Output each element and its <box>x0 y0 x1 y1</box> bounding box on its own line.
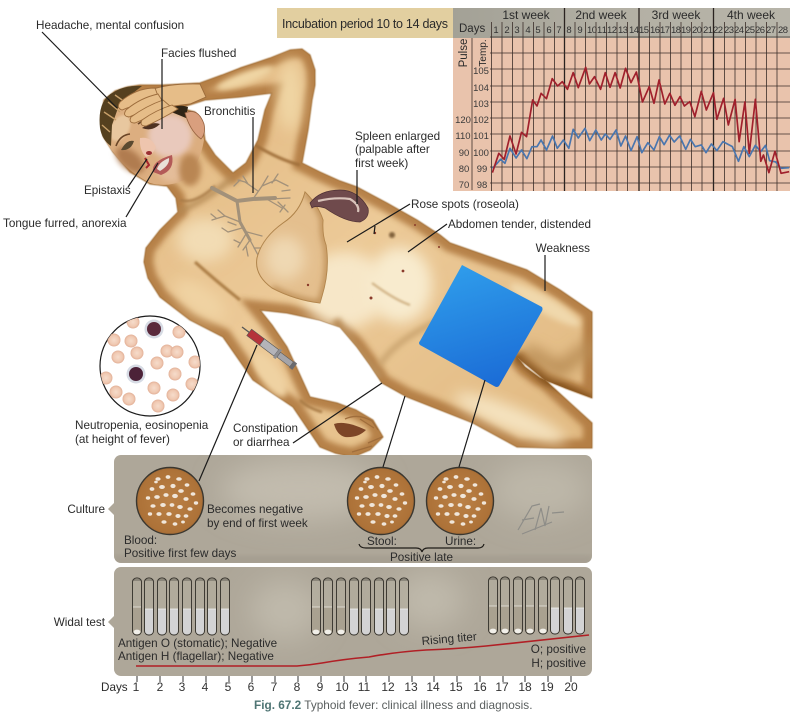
label: tongue <box>3 163 158 230</box>
days axis: 17 <box>495 680 509 694</box>
temperature line (red) <box>492 67 789 173</box>
chart header: 10 <box>587 25 597 36</box>
chart header: 25 <box>745 25 755 36</box>
blood culture note: by end of first week <box>207 517 308 530</box>
chart header: 17 <box>660 25 670 36</box>
mouth <box>153 155 173 175</box>
days axis: 9 <box>317 680 324 694</box>
days axis: 16 <box>473 680 487 694</box>
label: weakness: Weakness <box>536 242 590 255</box>
bronchial tree <box>211 174 290 256</box>
chart header: 3 <box>514 25 520 36</box>
chart header: 1st week <box>502 8 551 22</box>
days axis: 19 <box>540 680 554 694</box>
blood cell inset <box>100 316 202 416</box>
stool and urine results: Stool: <box>367 535 397 548</box>
ear <box>185 111 205 139</box>
blood result <box>124 534 237 560</box>
hand on forehead <box>118 84 206 126</box>
pulse axis values: 80 <box>459 164 469 175</box>
chart header: 28 <box>778 25 788 36</box>
chart header: 23 <box>724 25 734 36</box>
label: epistaxis <box>84 159 147 197</box>
chart header <box>453 8 790 38</box>
figure caption: Fig. 67.2 Typhoid fever: clinical illness and diagnosis. <box>254 698 532 712</box>
label: culture: Culture <box>67 503 105 516</box>
temperature axis values: 102 <box>473 115 489 126</box>
temperature axis values: 103 <box>473 99 489 110</box>
antigen negative text <box>118 637 277 663</box>
chart background <box>453 38 790 191</box>
label: abdomen <box>408 218 591 252</box>
chart header: 21 <box>703 25 713 36</box>
label: headache: Headache, mental confusion <box>36 19 184 32</box>
days axis: 12 <box>381 680 395 694</box>
patient figure <box>100 49 592 457</box>
pulse axis values: 90 <box>459 148 469 159</box>
label: facies flushed: Facies flushed <box>161 47 236 60</box>
white blood cells <box>126 320 164 384</box>
temperature and pulse chart <box>453 8 790 191</box>
chart header: 9 <box>577 25 583 36</box>
label: facies flushed <box>161 47 236 129</box>
label: spleen <box>355 130 440 204</box>
chart header: 2nd week <box>575 8 628 22</box>
blood culture dish <box>136 468 204 534</box>
body silhouette <box>101 49 592 457</box>
chart header: 4th week <box>727 8 776 22</box>
chart header: 26 <box>755 25 765 36</box>
test tubes, second series <box>312 578 408 635</box>
label: spleen: Spleen enlarged <box>355 130 440 143</box>
positive results: H; positive <box>531 657 586 670</box>
stool and urine results: Positive late <box>390 551 453 564</box>
days axis: 10 <box>335 680 349 694</box>
hand with open palm <box>334 416 382 452</box>
temperature axis values: 99 <box>477 164 487 175</box>
syringe <box>239 323 298 371</box>
label: spleen: first week) <box>355 157 408 170</box>
signature <box>518 504 564 534</box>
culture panel <box>114 455 592 564</box>
pulse axis values: 70 <box>459 180 469 191</box>
chart header: 22 <box>713 25 723 36</box>
days axis: 3 <box>179 680 186 694</box>
label: headache <box>36 19 184 108</box>
stool and urine results: Urine: <box>445 535 476 548</box>
incubation period box <box>277 8 453 38</box>
chart header: 8 <box>566 25 572 36</box>
chart header: 11 <box>597 25 607 36</box>
blood culture note <box>207 503 308 530</box>
temperature axis values: 101 <box>473 131 489 142</box>
chart header: 3rd week <box>652 8 701 22</box>
chart header: 20 <box>692 25 702 36</box>
pointer: urine line <box>459 380 485 467</box>
body shading <box>101 49 592 457</box>
label: neutropenia <box>75 419 209 446</box>
chart header: 14 <box>629 25 639 36</box>
days axis: 13 <box>404 680 418 694</box>
urine culture dish <box>426 468 494 534</box>
label: constipation: or diarrhea <box>233 436 290 449</box>
chart header: 15 <box>639 25 649 36</box>
label: rose spots <box>347 198 519 242</box>
chart header: 1 <box>493 25 499 36</box>
label: widal test: Widal test <box>54 616 106 629</box>
rising titer label: Rising titer <box>421 630 477 648</box>
chart header: 4 <box>525 25 531 36</box>
blue rectangle covering groin <box>419 265 542 387</box>
antigen negative text: Antigen O (stomatic); Negative <box>118 637 277 650</box>
pulse line (blue) <box>492 128 789 168</box>
label: epistaxis: Epistaxis <box>84 184 131 197</box>
test tubes, first series <box>132 578 230 635</box>
days axis: 6 <box>248 680 255 694</box>
antigen negative text: Antigen H (flagellar); Negative <box>118 650 274 663</box>
blood culture note: Becomes negative <box>207 503 303 516</box>
nose <box>140 138 156 157</box>
chart header: 27 <box>766 25 776 36</box>
chart header: 13 <box>618 25 628 36</box>
label: bronchitis: Bronchitis <box>204 105 255 118</box>
days axis: 8 <box>294 680 301 694</box>
blood result: Blood: <box>124 534 157 547</box>
days axis: 5 <box>225 680 232 694</box>
days axis <box>101 676 578 694</box>
label: neutropenia: (at height of fever) <box>75 433 170 446</box>
label: weakness <box>536 242 590 291</box>
temperature axis values: 105 <box>473 66 489 77</box>
chart header: 12 <box>607 25 617 36</box>
temperature axis values: 98 <box>477 180 487 191</box>
liver <box>257 192 327 303</box>
label: constipation <box>233 383 382 449</box>
pointer: stool line <box>383 396 405 467</box>
days axis: 14 <box>426 680 440 694</box>
eyes <box>116 118 160 150</box>
head and face <box>100 86 205 186</box>
chart header: Days <box>459 23 485 35</box>
test tubes, third series <box>488 577 584 634</box>
chart header: 5 <box>535 25 541 36</box>
stool and urine results <box>359 535 484 564</box>
pulse axis label: Pulse <box>458 39 470 67</box>
label: constipation: Constipation <box>233 422 298 435</box>
pulse axis values <box>455 115 471 191</box>
blood result: Positive first few days <box>124 547 237 560</box>
label: neutropenia: Neutropenia, eosinopenia <box>75 419 209 432</box>
label: spleen: (palpable after <box>355 143 430 156</box>
chart header: 18 <box>671 25 681 36</box>
days axis: 11 <box>358 680 371 694</box>
temperature axis values: 104 <box>473 83 489 94</box>
label: bronchitis <box>204 105 255 193</box>
days axis: 15 <box>449 680 463 694</box>
days axis: Days <box>101 681 128 694</box>
days axis: 7 <box>271 680 278 694</box>
label: abdomen: Abdomen tender, distended <box>448 218 591 231</box>
days axis: 2 <box>157 680 164 694</box>
chart header: 19 <box>681 25 691 36</box>
red blood cells <box>100 316 202 412</box>
pulse axis values: 120 <box>455 115 471 126</box>
spleen <box>310 190 368 222</box>
incubation period box: Incubation period 10 to 14 days <box>282 17 448 31</box>
hair <box>100 86 142 146</box>
pulse axis values: 110 <box>455 131 471 142</box>
days axis: 20 <box>564 680 578 694</box>
days axis: 1 <box>133 680 140 694</box>
positive results <box>531 643 586 670</box>
label: rose spots: Rose spots (roseola) <box>411 198 519 211</box>
chart header: 6 <box>546 25 552 36</box>
days axis: 4 <box>202 680 209 694</box>
positive results: O; positive <box>531 643 586 656</box>
chart header: 24 <box>734 25 744 36</box>
pointer: blood culture line <box>199 345 257 481</box>
rose spots <box>307 224 440 300</box>
chart header: 2 <box>504 25 510 36</box>
temperature axis values <box>473 66 489 191</box>
widal test panel <box>114 567 592 676</box>
temperature axis values: 100 <box>473 148 489 159</box>
label: tongue: Tongue furred, anorexia <box>3 217 127 230</box>
chart grid <box>472 8 790 191</box>
chart header: 16 <box>650 25 660 36</box>
chart header: 7 <box>556 25 562 36</box>
rising titer curve <box>136 635 589 666</box>
stool culture dish <box>348 468 414 534</box>
days axis: 18 <box>518 680 532 694</box>
face skin <box>101 100 204 185</box>
temp axis label: Temp. <box>478 39 489 67</box>
